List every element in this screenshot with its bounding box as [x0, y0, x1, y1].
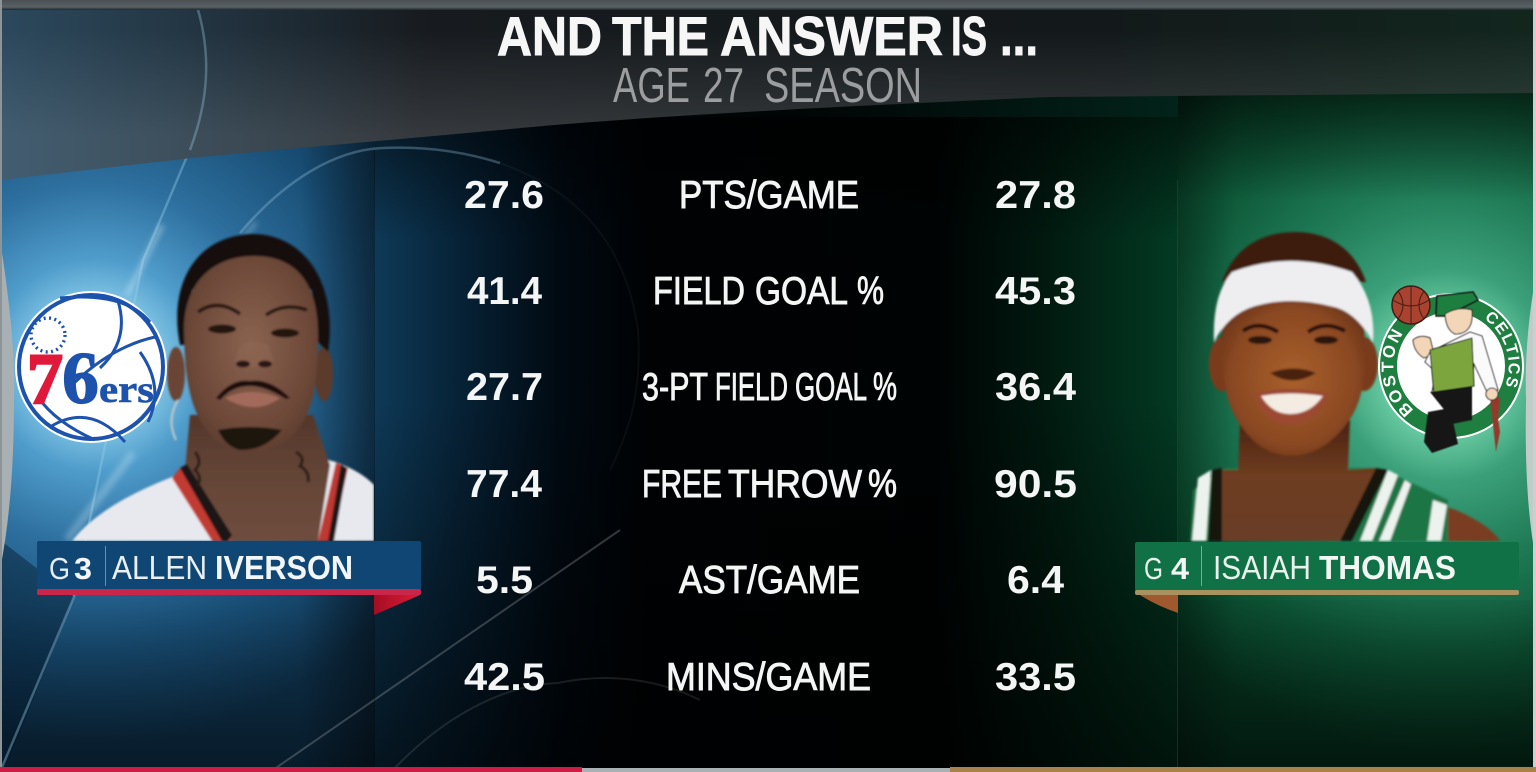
- face: [1222, 299, 1365, 456]
- row: field goal percentage: [467, 270, 1076, 313]
- chest and neck: [185, 415, 330, 541]
- row: points per game: [464, 174, 1076, 217]
- row: minutes per game: 42.5: [464, 656, 545, 699]
- row: three point percentage: 3-PT: [642, 366, 708, 409]
- row: assists per game: 6.4: [1007, 559, 1064, 602]
- leprechaun: [1413, 292, 1500, 453]
- row: three point percentage: FIELD: [715, 366, 788, 409]
- row: three point percentage: %: [873, 366, 897, 409]
- nameplate: Allen Iverson: G: [49, 551, 70, 586]
- collar right: [318, 462, 348, 541]
- logo wordmark: 7: [27, 339, 63, 419]
- nose: [1270, 368, 1316, 380]
- row: points per game: PTS/GAME: [679, 174, 859, 217]
- row: points per game: 27.8: [995, 174, 1076, 217]
- title: AND: [497, 5, 602, 67]
- goatee: [218, 427, 282, 450]
- row: assists per game: 5.5: [476, 559, 533, 602]
- collar left: [172, 468, 232, 541]
- row: points per game: 27.6: [464, 174, 544, 217]
- teeth: [1261, 394, 1323, 414]
- arm: [1446, 506, 1500, 542]
- row: field goal percentage: 45.3: [995, 270, 1076, 313]
- basketball: [1392, 286, 1430, 324]
- row: free throw percentage: THROW: [728, 463, 862, 506]
- logo ring text: Boston: BOSTON: [1382, 328, 1413, 418]
- row: field goal percentage: FIELD: [653, 270, 745, 313]
- tattoos: [195, 452, 308, 486]
- player portrait: Isaiah Thomas: [1190, 232, 1500, 541]
- nameplate: Isaiah Thomas: ISAIAH: [1213, 549, 1311, 586]
- row: free throw percentage: %: [868, 463, 897, 506]
- row: assists per game: AST/GAME: [679, 559, 860, 602]
- nameplate: Isaiah Thomas: 4: [1171, 551, 1190, 586]
- row: three point percentage: GOAL: [795, 366, 867, 409]
- chest and neck: [1214, 420, 1378, 541]
- headband: [1214, 261, 1373, 342]
- subtitle: AGE: [613, 59, 690, 113]
- row: free throw percentage: [466, 463, 1077, 506]
- row: three point percentage: 27.7: [466, 366, 543, 409]
- nameplate: Allen Iverson: ALLEN: [112, 549, 207, 586]
- nameplate: Allen Iverson: [37, 541, 421, 615]
- row: three point percentage: 36.4: [995, 366, 1076, 409]
- hair: [1222, 232, 1366, 282]
- nose: [270, 359, 272, 362]
- row: field goal percentage: GOAL: [755, 270, 848, 313]
- row: free throw percentage: FREE: [642, 463, 722, 506]
- title: THE: [612, 5, 709, 67]
- subtitle: SEASON: [764, 59, 922, 113]
- title: IS: [951, 5, 987, 67]
- moustache: [216, 381, 290, 400]
- subtitle: 27: [703, 59, 744, 113]
- top header band: [0, 0, 1536, 182]
- row: three point percentage: [466, 366, 1076, 409]
- row: free throw percentage: 77.4: [466, 463, 542, 506]
- row: assists per game: [476, 559, 1064, 602]
- row: minutes per game: MINS/GAME: [666, 656, 871, 699]
- row: minutes per game: 33.5: [995, 656, 1076, 699]
- nameplate: Isaiah Thomas: [1135, 542, 1519, 613]
- ears: [167, 347, 185, 401]
- row: free throw percentage: 90.5: [994, 463, 1077, 506]
- logo: Celtics: [1378, 285, 1524, 454]
- ears: [1208, 336, 1226, 392]
- jersey: [72, 458, 374, 541]
- logo wordmark: [27, 338, 154, 420]
- stats table: [464, 174, 1077, 699]
- logo: 76ers: [15, 291, 167, 443]
- logo wordmark: 6: [62, 338, 99, 420]
- jersey: [1190, 468, 1448, 541]
- mouth: [1255, 389, 1328, 424]
- brows and eyes: [198, 305, 307, 315]
- title: [497, 5, 1038, 67]
- nameplate: Isaiah Thomas: THOMAS: [1319, 549, 1456, 586]
- title: ...: [1000, 5, 1038, 67]
- subtitle: [613, 59, 922, 113]
- logo wordmark: ers: [99, 369, 154, 411]
- face: [184, 256, 318, 452]
- player portrait: Allen Iverson: [72, 234, 374, 541]
- lips: [225, 392, 280, 407]
- row: field goal percentage: 41.4: [467, 270, 542, 313]
- ear cord: [171, 400, 178, 440]
- row: minutes per game: [464, 656, 1076, 699]
- nameplate: Isaiah Thomas: G: [1144, 551, 1163, 586]
- nameplate: Allen Iverson: 3: [74, 551, 92, 586]
- logo ring text: Celtics: CELTICS: [1486, 312, 1520, 388]
- title: ANSWER: [720, 5, 943, 67]
- hair: [177, 234, 330, 352]
- bottom colour bar: [0, 767, 1536, 772]
- brows and eyes: [1243, 326, 1345, 332]
- row: field goal percentage: %: [857, 270, 884, 313]
- nameplate: Allen Iverson: IVERSON: [215, 549, 353, 586]
